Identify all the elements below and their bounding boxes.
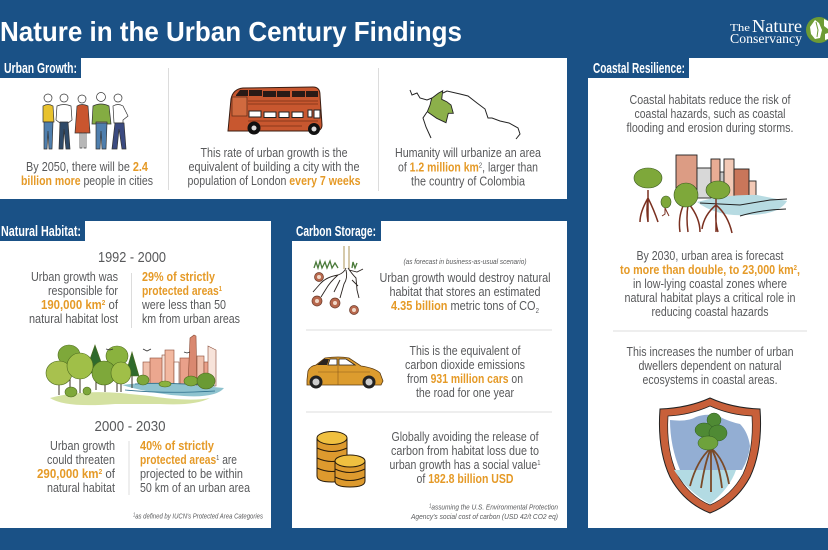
- text: 931 million cars: from 931 million cars on: [407, 372, 523, 386]
- text: 1.2 million km2: the country of Colombia: [411, 174, 525, 188]
- text: 29% protected areas: protected areas: [142, 284, 219, 298]
- logo: The Nature Conservancy: Conservancy: [730, 32, 802, 47]
- text: to more than double: natural habitat plays a critical role in: [624, 291, 796, 305]
- heading: carbon storage: Carbon Storage:: [296, 223, 376, 240]
- text: 4.35 billion metric tons: (as forecast in business-as-usual scenario): [404, 257, 527, 266]
- text: 29% protected areas: [141, 270, 240, 326]
- text: 4.35 billion metric tons: Urban growth would destroy natural: [380, 271, 550, 285]
- text: threatened habitat: 290,000 km: [37, 467, 99, 481]
- text: threatened habitat: natural habitat: [47, 481, 115, 495]
- footnote: IUCN: as defined by IUCN's Protected Area Categories: [135, 512, 263, 520]
- footnote: EPA: Agency's social cost of carbon (USD 42/t CO2 eq): [410, 512, 558, 521]
- heading: urban growth: [0, 58, 81, 78]
- text: 2.4 billion more: By 2050, there will be 2.4: [26, 160, 148, 174]
- heading: natural habitat: [0, 221, 85, 241]
- title: Nature in the Urban Century Findings: [0, 16, 462, 47]
- text: every 7 weeks: [188, 146, 361, 188]
- text: coastal habitats: Coastal habitats reduce the risk of: [630, 93, 791, 107]
- footnote: EPA: [410, 502, 558, 521]
- logo: The Nature Conservancy: Nature: [752, 16, 802, 36]
- text: habitat lost: [29, 270, 118, 326]
- text: 40% protected areas: are: [219, 453, 237, 467]
- text: 931 million cars: [405, 344, 525, 400]
- text: to more than double: [620, 249, 800, 319]
- text: 182.8 billion USD: carbon from habitat loss due to: [391, 444, 539, 458]
- heading: urban growth: Urban Growth:: [4, 60, 77, 77]
- text: every 7 weeks: equivalent of building a city with the: [188, 160, 360, 174]
- text: to more than double: ,: [797, 263, 800, 277]
- text: 29% protected areas: were less than 50: [141, 298, 226, 312]
- text: 1.2 million km2: [395, 146, 541, 188]
- text: 40% protected areas: projected to be within: [140, 467, 243, 481]
- text: habitat lost: natural habitat lost: [29, 312, 118, 326]
- illustration: trees and city by water: [46, 335, 224, 405]
- heading: 2000 - 2030: 2000 - 2030: [94, 418, 166, 435]
- text: 29% protected areas: km from urban areas: [142, 312, 240, 326]
- heading: coastal resilience: [588, 58, 689, 78]
- text: 182.8 billion USD: [390, 430, 541, 486]
- text: 40% protected areas: [140, 439, 250, 495]
- heading: coastal resilience: Coastal Resilience:: [593, 60, 685, 77]
- text: 182.8 billion USD: of 182.8 billion USD: [416, 472, 514, 486]
- text: urban dwellers: dwellers dependent on natural: [638, 359, 782, 373]
- heading: natural habitat: Natural Habitat:: [1, 223, 81, 240]
- icon: mangrove shield: [659, 398, 761, 513]
- icon: roots and carbon: [312, 246, 363, 314]
- text: threatened habitat: of: [102, 467, 115, 481]
- text: 40% protected areas: 1: [216, 455, 219, 462]
- text: to more than double: in low-lying coastal zones where: [633, 277, 787, 291]
- illustration: mangroves and city: [634, 155, 787, 233]
- footnote: EPA: 1: [429, 504, 432, 510]
- text: 29% protected areas: 1: [219, 286, 222, 293]
- footnote: EPA: assuming the U.S. Environmental Protection: [431, 502, 558, 512]
- text: 29% protected areas: 29% of strictly: [142, 270, 215, 284]
- logo: The Nature Conservancy: The: [730, 22, 750, 34]
- icon: group of people: [43, 92, 128, 149]
- text: habitat lost: Urban growth was: [31, 270, 118, 284]
- text: threatened habitat: [37, 439, 115, 495]
- text: every 7 weeks: population of London every 7 weeks: [188, 174, 361, 188]
- text: 40% protected areas: 40% of strictly: [140, 439, 214, 453]
- text: 931 million cars: the road for one year: [416, 386, 514, 400]
- text: habitat lost: 190,000 km: [41, 298, 102, 312]
- text: 4.35 billion metric tons: habitat that stores an estimated: [390, 285, 541, 299]
- text: 182.8 billion USD: urban growth has a social value: [390, 458, 565, 472]
- text: every 7 weeks: This rate of urban growth is the: [200, 146, 348, 160]
- heading: 1992 - 2000: 1992 - 2000: [98, 249, 166, 266]
- text: urban dwellers: [626, 345, 794, 387]
- icon: car: [307, 357, 383, 388]
- text: 40% protected areas: 50 km of an urban area: [140, 481, 250, 495]
- text: 1.2 million km2: , larger than: [482, 160, 538, 174]
- text: to more than double: to more than double, to 23,000 km: [620, 263, 822, 277]
- heading: carbon storage: [292, 221, 381, 241]
- text: 4.35 billion metric tons: [380, 257, 550, 315]
- panel: carbon storage: [292, 221, 567, 528]
- text: habitat lost: of: [105, 298, 118, 312]
- text: 931 million cars: This is the equivalent of: [410, 344, 521, 358]
- text: 182.8 billion USD: Globally avoiding the release of: [392, 430, 539, 444]
- text: 40% protected areas: protected areas: [140, 453, 216, 467]
- text: to more than double: reducing coastal hazards: [652, 305, 768, 319]
- text: habitat lost: responsible for: [48, 284, 118, 298]
- text: threatened habitat: Urban growth: [50, 439, 115, 453]
- text: 931 million cars: carbon dioxide emissions: [405, 358, 525, 372]
- text: to more than double: 2: [794, 265, 797, 272]
- text: to more than double: By 2030, urban area is forecast: [636, 249, 784, 263]
- text: 2.4 billion more: billion more people in cities: [21, 174, 153, 188]
- text: 1.2 million km2: of 1.2 million km: [398, 160, 492, 174]
- logo: The Nature Conservancy: [730, 16, 828, 47]
- text: threatened habitat: could threaten: [47, 453, 115, 467]
- text: 1.2 million km2: 2: [479, 162, 482, 170]
- text: 4.35 billion metric tons: 4.35 billion metric tons of CO: [391, 299, 548, 313]
- text: coastal habitats: coastal hazards, such as coastal: [634, 107, 786, 121]
- text: habitat lost: 2: [102, 300, 105, 307]
- text: coastal habitats: [626, 93, 794, 135]
- panel: natural habitat: [0, 221, 271, 528]
- text: 182.8 billion USD: 1: [537, 460, 541, 467]
- panel: coastal resilience: [588, 58, 828, 528]
- icon: double-decker bus: [228, 87, 322, 135]
- text: coastal habitats: flooding and erosion during storms.: [626, 121, 794, 135]
- icon: map of Colombia: [410, 90, 520, 139]
- icon: stacks of coins: [317, 432, 365, 487]
- text: 2.4 billion more: [21, 160, 153, 188]
- text: urban dwellers: This increases the number of urban: [626, 345, 794, 359]
- text: threatened habitat: 2: [99, 469, 102, 476]
- text: 1.2 million km2: Humanity will urbanize an area: [395, 146, 541, 160]
- text: urban dwellers: ecosystems in coastal areas.: [642, 373, 778, 387]
- panel: urban growth: [0, 58, 567, 199]
- footnote: IUCN: 1: [133, 512, 135, 518]
- text: 4.35 billion metric tons: 2: [536, 308, 539, 315]
